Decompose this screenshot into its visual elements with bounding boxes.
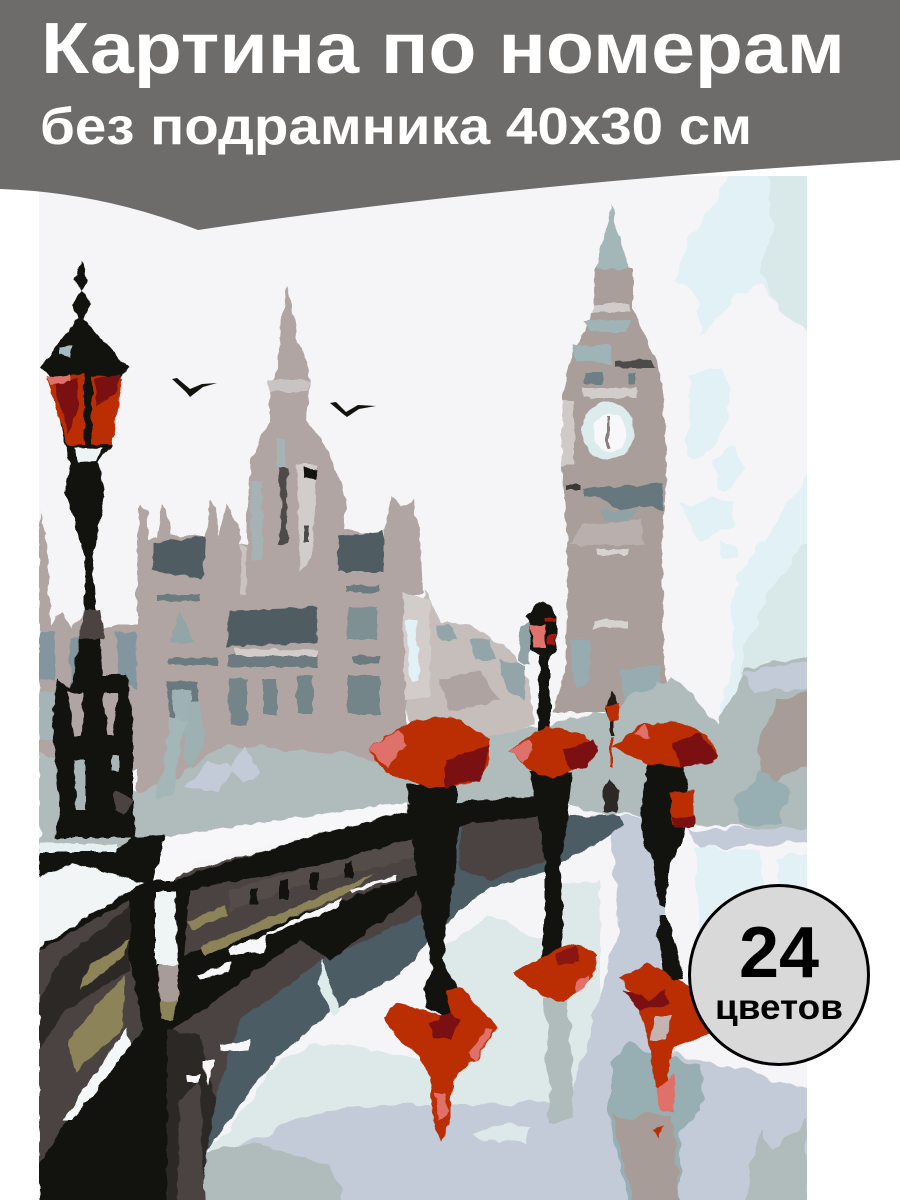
tower highlights bbox=[240, 380, 430, 700]
bridge railing bbox=[39, 796, 625, 1200]
parliament building bbox=[137, 284, 430, 795]
badge: 24 colors bbox=[690, 886, 868, 1064]
olive strip bbox=[200, 873, 375, 955]
painting bbox=[39, 170, 815, 1200]
subtitle: без подрамника 40х30 см bbox=[40, 98, 752, 156]
reflection left bbox=[382, 987, 498, 1142]
parliament windows bbox=[153, 532, 383, 770]
street and reflections bbox=[200, 815, 815, 1200]
small lamp posts bbox=[518, 601, 620, 812]
figure right bbox=[640, 763, 692, 907]
figure middle bbox=[530, 772, 573, 962]
lantern glass bbox=[47, 375, 84, 445]
rail studs bbox=[228, 838, 417, 912]
far buildings left bbox=[39, 510, 145, 770]
reflection middle bbox=[513, 943, 598, 1003]
umbrella left bbox=[367, 716, 490, 788]
badge label: цветов bbox=[715, 988, 843, 1027]
slate shadow bbox=[205, 815, 625, 1153]
banner bbox=[0, 0, 900, 230]
birds bbox=[172, 378, 376, 417]
snow on rail bbox=[153, 802, 408, 880]
figure left bbox=[407, 785, 457, 1022]
big ben bbox=[552, 204, 672, 712]
dark brown mass bbox=[39, 848, 422, 1100]
umbrella middle bbox=[510, 727, 597, 779]
big lamp post bbox=[40, 261, 136, 838]
misty ground bbox=[39, 655, 815, 852]
sky washes bbox=[677, 170, 815, 712]
reflection right bbox=[620, 963, 712, 1093]
umbrella right bbox=[613, 722, 718, 767]
tower dark detail bbox=[278, 468, 318, 545]
badge number: 24 bbox=[739, 913, 819, 993]
right wing of parliament bbox=[406, 590, 535, 737]
figures with red umbrellas bbox=[367, 716, 718, 1142]
lamp base openings bbox=[67, 693, 83, 736]
clock face bbox=[582, 402, 634, 460]
title: Картина по номерам bbox=[41, 9, 845, 89]
black rails bbox=[39, 796, 548, 1200]
spire bbox=[595, 204, 630, 269]
